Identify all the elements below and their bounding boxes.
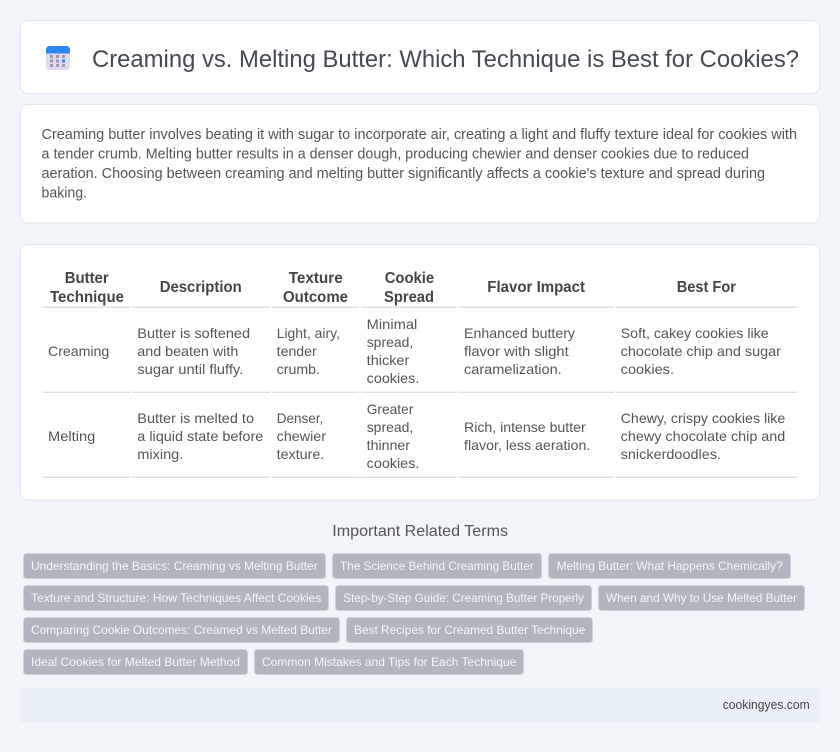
- table row: melting: Rich, intense butter: [464, 419, 586, 435]
- table row: melting: chewier: [277, 428, 326, 444]
- table header: Cookie: [385, 270, 434, 287]
- table row: melting: a liquid state before: [137, 428, 264, 444]
- table header: Best For: [677, 279, 736, 296]
- panel: related term chips: Ideal Cookies for Melted Butter Method: [31, 655, 240, 669]
- panel: related term chips: [24, 554, 804, 674]
- panel: comparison table: [20, 244, 820, 500]
- table row: melting: Denser,: [277, 410, 323, 426]
- table row: creaming: Creaming: [48, 343, 109, 359]
- text block: intro: aeration. Choosing between creaming and melting butter significantly affects a cookie's texture and spread during: [42, 166, 765, 182]
- table header: Texture: [289, 270, 343, 287]
- table row: creaming: [48, 316, 781, 386]
- table row: melting: texture.: [277, 446, 324, 462]
- panel: related term chips: Understanding the Basics: Creaming vs Melting Butter: [31, 559, 318, 573]
- panel: related term chips: Best Recipes for Creamed Butter Technique: [354, 623, 586, 637]
- table row: creaming: Enhanced buttery: [464, 325, 575, 341]
- table row: melting: Chewy, crispy cookies like: [621, 410, 786, 426]
- table row: creaming: cookies.: [367, 370, 419, 386]
- table row: creaming: tender: [277, 343, 317, 359]
- table row: creaming: chocolate chip and sugar: [621, 343, 781, 359]
- panel: footer: [20, 688, 820, 722]
- table row: melting: Butter is melted to: [137, 410, 254, 426]
- footer source text: cookingyes.com: [723, 698, 810, 712]
- text block: intro: Creaming butter involves beating it with sugar to incorporate air, creating a light and fluffy texture ideal for cookies with: [42, 127, 797, 143]
- table row: creaming: Light, airy,: [277, 325, 340, 341]
- table row: melting: chewy chocolate chip and: [621, 428, 785, 444]
- table header: Flavor Impact: [487, 279, 586, 296]
- heading: related terms: Important Related Terms: [332, 523, 508, 540]
- table header: [50, 270, 736, 306]
- title: Creaming vs. Melting Butter: Which Technique is Best for Cookies?: [92, 46, 799, 73]
- table row: creaming: Butter is softened: [137, 325, 250, 341]
- panel: related term chips: When and Why to Use Melted Butter: [606, 591, 797, 605]
- panel: related term chips: Texture and Structure: How Techniques Affect Cookies: [31, 591, 321, 605]
- text block: intro: baking.: [42, 186, 87, 202]
- table row: creaming: crumb.: [277, 361, 320, 377]
- table row: creaming: spread,: [367, 334, 413, 350]
- panel: related term chips: The Science Behind Creaming Butter: [340, 559, 534, 573]
- panel: related term chips: Step-by-Step Guide: Creaming Butter Properly: [343, 591, 584, 605]
- table row: creaming: sugar until fluffy.: [137, 361, 243, 377]
- icon: calendar: [46, 46, 70, 70]
- table row: melting: mixing.: [137, 446, 183, 462]
- table row: melting: cookies.: [367, 455, 419, 471]
- table row: creaming: Soft, cakey cookies like: [621, 325, 769, 341]
- text block: intro: a tender crumb. Melting butter results in a denser dough, producing chewier and denser cookies due to reduced: [42, 146, 749, 162]
- table row: melting: snickerdoodles.: [621, 446, 721, 462]
- table header: Butter: [65, 270, 109, 287]
- table row: melting: thinner: [367, 437, 410, 453]
- table header: Outcome: [283, 289, 348, 306]
- table row: melting: flavor, less aeration.: [464, 437, 590, 453]
- table header: Spread: [384, 289, 434, 306]
- table row: creaming: flavor with slight: [464, 343, 569, 359]
- table header: Description: [160, 279, 242, 296]
- table row: creaming: and beaten with: [137, 343, 238, 359]
- table row: creaming: thicker: [367, 352, 410, 368]
- text block: intro: [42, 127, 797, 202]
- table row: creaming: caramelization.: [464, 361, 562, 377]
- table row: creaming: cookies.: [621, 361, 674, 377]
- panel: related term chips: Common Mistakes and Tips for Each Technique: [262, 655, 517, 669]
- panel: related term chips: Comparing Cookie Outcomes: Creamed vs Melted Butter: [31, 623, 332, 637]
- panel: intro paragraph: [20, 104, 820, 223]
- panel: title card: [20, 20, 820, 94]
- panel: related term chips: Melting Butter: What Happens Chemically?: [557, 559, 783, 573]
- table row: melting: Greater: [367, 401, 414, 417]
- table row: creaming: Minimal: [367, 316, 417, 332]
- table header: Technique: [50, 289, 124, 306]
- table row: melting: [48, 401, 786, 471]
- table row: melting: Melting: [48, 428, 95, 444]
- table row: melting: spread,: [367, 419, 413, 435]
